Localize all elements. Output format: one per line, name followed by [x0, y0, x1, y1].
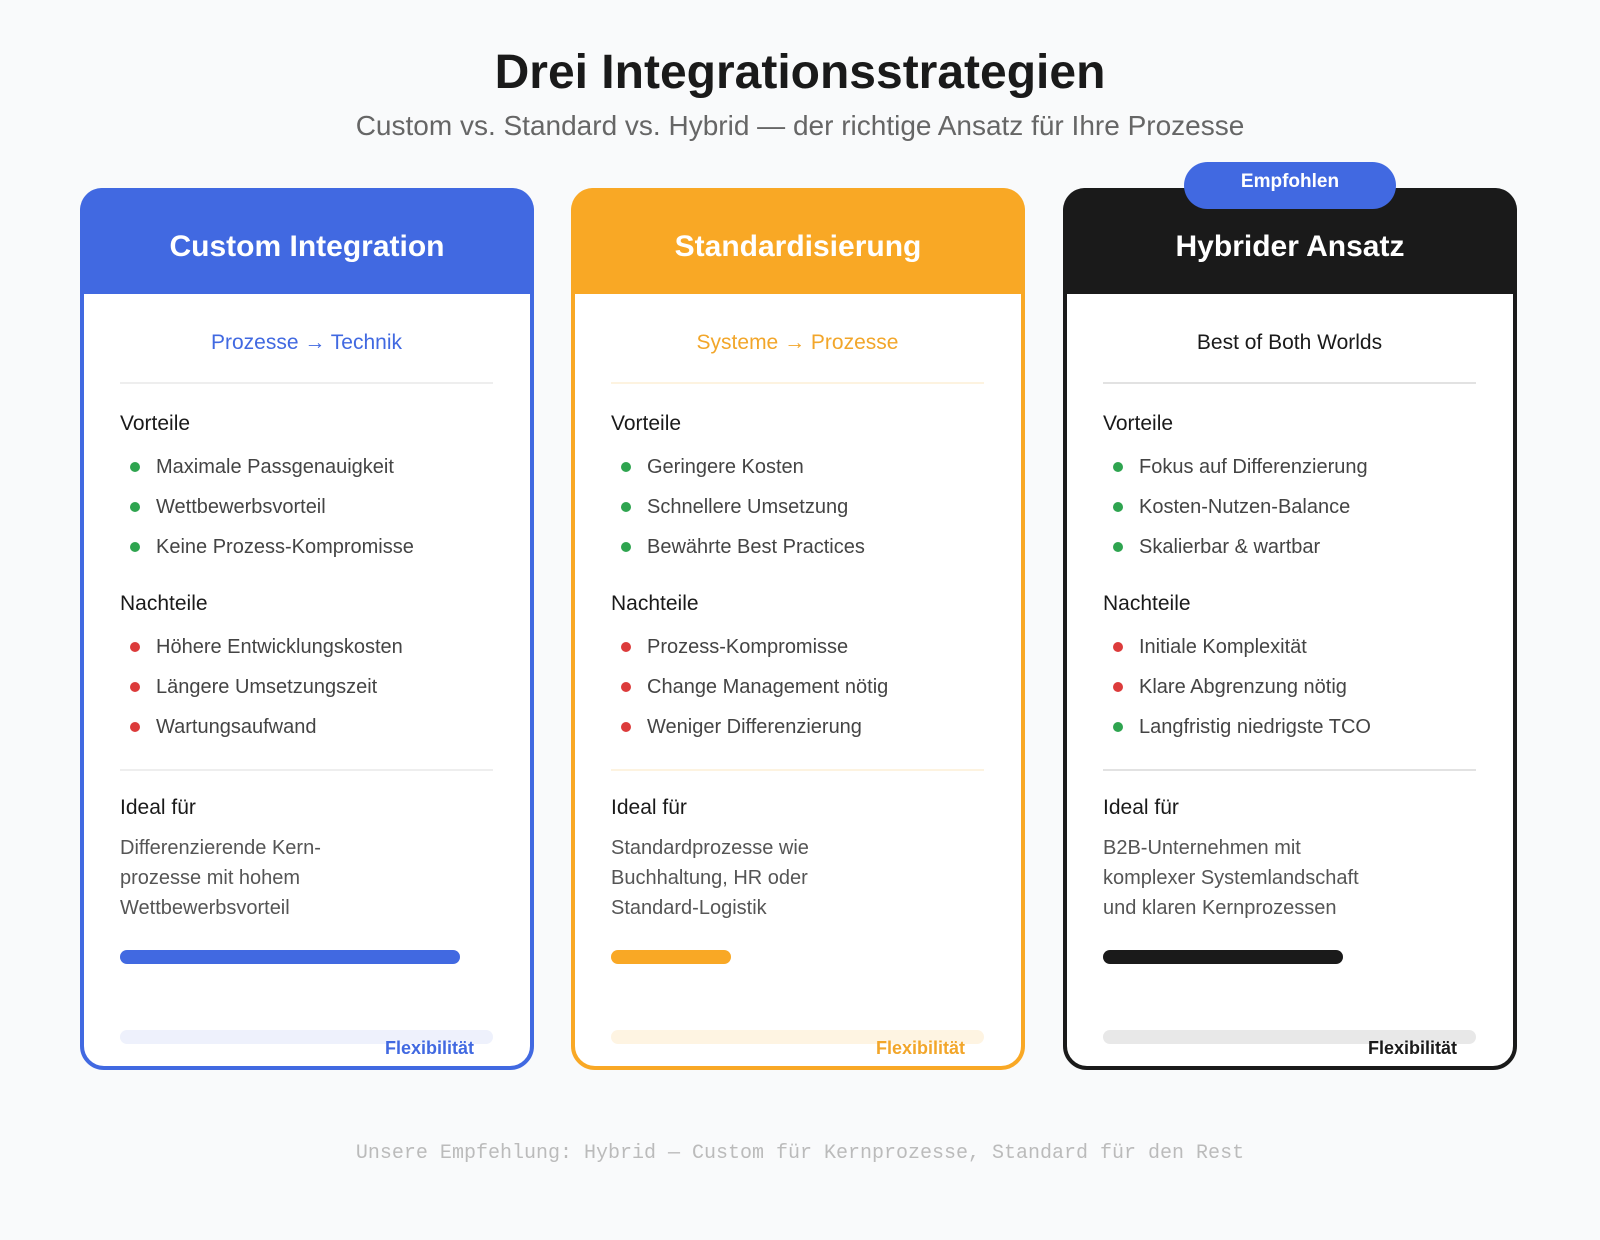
- panel: hybrid: [1063, 188, 1517, 1070]
- header: standard: Standardisierung: [675, 230, 921, 263]
- flexibility track: [120, 1030, 493, 1044]
- cons: [1103, 592, 1371, 738]
- cons: Change Management nötig: [647, 676, 888, 698]
- title: Drei Integrationsstrategien: [495, 46, 1105, 99]
- cons: Nachteile: [120, 592, 208, 615]
- pros: Geringere Kosten: [647, 456, 804, 478]
- pros: Kosten-Nutzen-Balance: [1139, 496, 1350, 518]
- cons: Längere Umsetzungszeit: [156, 676, 377, 698]
- pros: [611, 412, 865, 558]
- pros: Bewährte Best Practices: [647, 536, 865, 558]
- ideal for: Buchhaltung, HR oder: [611, 867, 808, 889]
- pros: Vorteile: [1103, 412, 1173, 435]
- pros: Vorteile: [120, 412, 190, 435]
- header: custom: Custom Integration: [170, 230, 444, 263]
- flexibility track: [611, 1030, 984, 1044]
- ideal for: B2B-Unternehmen mit: [1103, 837, 1301, 859]
- header: standard: [571, 188, 1025, 294]
- badge: empfohlen: [1184, 162, 1396, 209]
- ideal for: [120, 796, 321, 919]
- ideal for: Ideal für: [120, 796, 196, 819]
- cons: Langfristig niedrigste TCO: [1139, 716, 1371, 738]
- header: hybrid: [1063, 188, 1517, 294]
- ideal for: [611, 796, 809, 919]
- ideal for: prozesse mit hohem: [120, 867, 300, 889]
- pros: Fokus auf Differenzierung: [1139, 456, 1368, 478]
- ideal for: Ideal für: [1103, 796, 1179, 819]
- cons: [120, 592, 403, 738]
- cons: Klare Abgrenzung nötig: [1139, 676, 1347, 698]
- flexibility track: [1103, 1030, 1476, 1044]
- cons: [611, 592, 888, 738]
- ideal for: komplexer Systemlandschaft: [1103, 867, 1359, 889]
- pros: [120, 412, 414, 558]
- pros: Wettbewerbsvorteil: [156, 496, 326, 518]
- cons: Höhere Entwicklungskosten: [156, 636, 403, 658]
- cons: Nachteile: [1103, 592, 1191, 615]
- panel: custom integration: Flexibilität: [385, 1038, 474, 1058]
- tagline: Systeme → Prozesse: [697, 331, 898, 354]
- pros: Maximale Passgenauigkeit: [156, 456, 394, 478]
- pros: Schnellere Umsetzung: [647, 496, 848, 518]
- bar: [1103, 950, 1343, 964]
- ideal for: und klaren Kernprozessen: [1103, 897, 1336, 919]
- cons: Nachteile: [611, 592, 699, 615]
- panel: standardisierung: Flexibilität: [876, 1038, 965, 1058]
- header: custom: [80, 188, 534, 294]
- ideal for: Differenzierende Kern-: [120, 837, 321, 859]
- bar: [611, 950, 731, 964]
- cons: Initiale Komplexität: [1139, 636, 1307, 658]
- bar: [120, 950, 460, 964]
- panel: hybrid: Flexibilität: [1368, 1038, 1457, 1058]
- pros: Vorteile: [611, 412, 681, 435]
- ideal for: Standardprozesse wie: [611, 837, 809, 859]
- footer note: Unsere Empfehlung: Hybrid — Custom für Kernprozesse, Standard für den Rest: [356, 1142, 1244, 1165]
- panel: custom integration: [80, 188, 534, 1070]
- tagline: Best of Both Worlds: [1197, 331, 1382, 354]
- cons: Prozess-Kompromisse: [647, 636, 848, 658]
- cons: Weniger Differenzierung: [647, 716, 862, 738]
- tagline: Prozesse → Technik: [211, 331, 402, 354]
- ideal for: Standard-Logistik: [611, 897, 767, 919]
- header: hybrid: Hybrider Ansatz: [1176, 230, 1404, 263]
- subtitle: Custom vs. Standard vs. Hybrid — der richtige Ansatz für Ihre Prozesse: [356, 110, 1244, 141]
- cons: Wartungsaufwand: [156, 716, 316, 738]
- badge: empfohlen: Empfohlen: [1241, 171, 1339, 192]
- panel: standardisierung: [571, 188, 1025, 1070]
- ideal for: [1103, 796, 1359, 919]
- ideal for: Wettbewerbsvorteil: [120, 897, 290, 919]
- pros: Keine Prozess-Kompromisse: [156, 536, 414, 558]
- ideal for: Ideal für: [611, 796, 687, 819]
- pros: Skalierbar & wartbar: [1139, 536, 1320, 558]
- pros: [1103, 412, 1368, 558]
